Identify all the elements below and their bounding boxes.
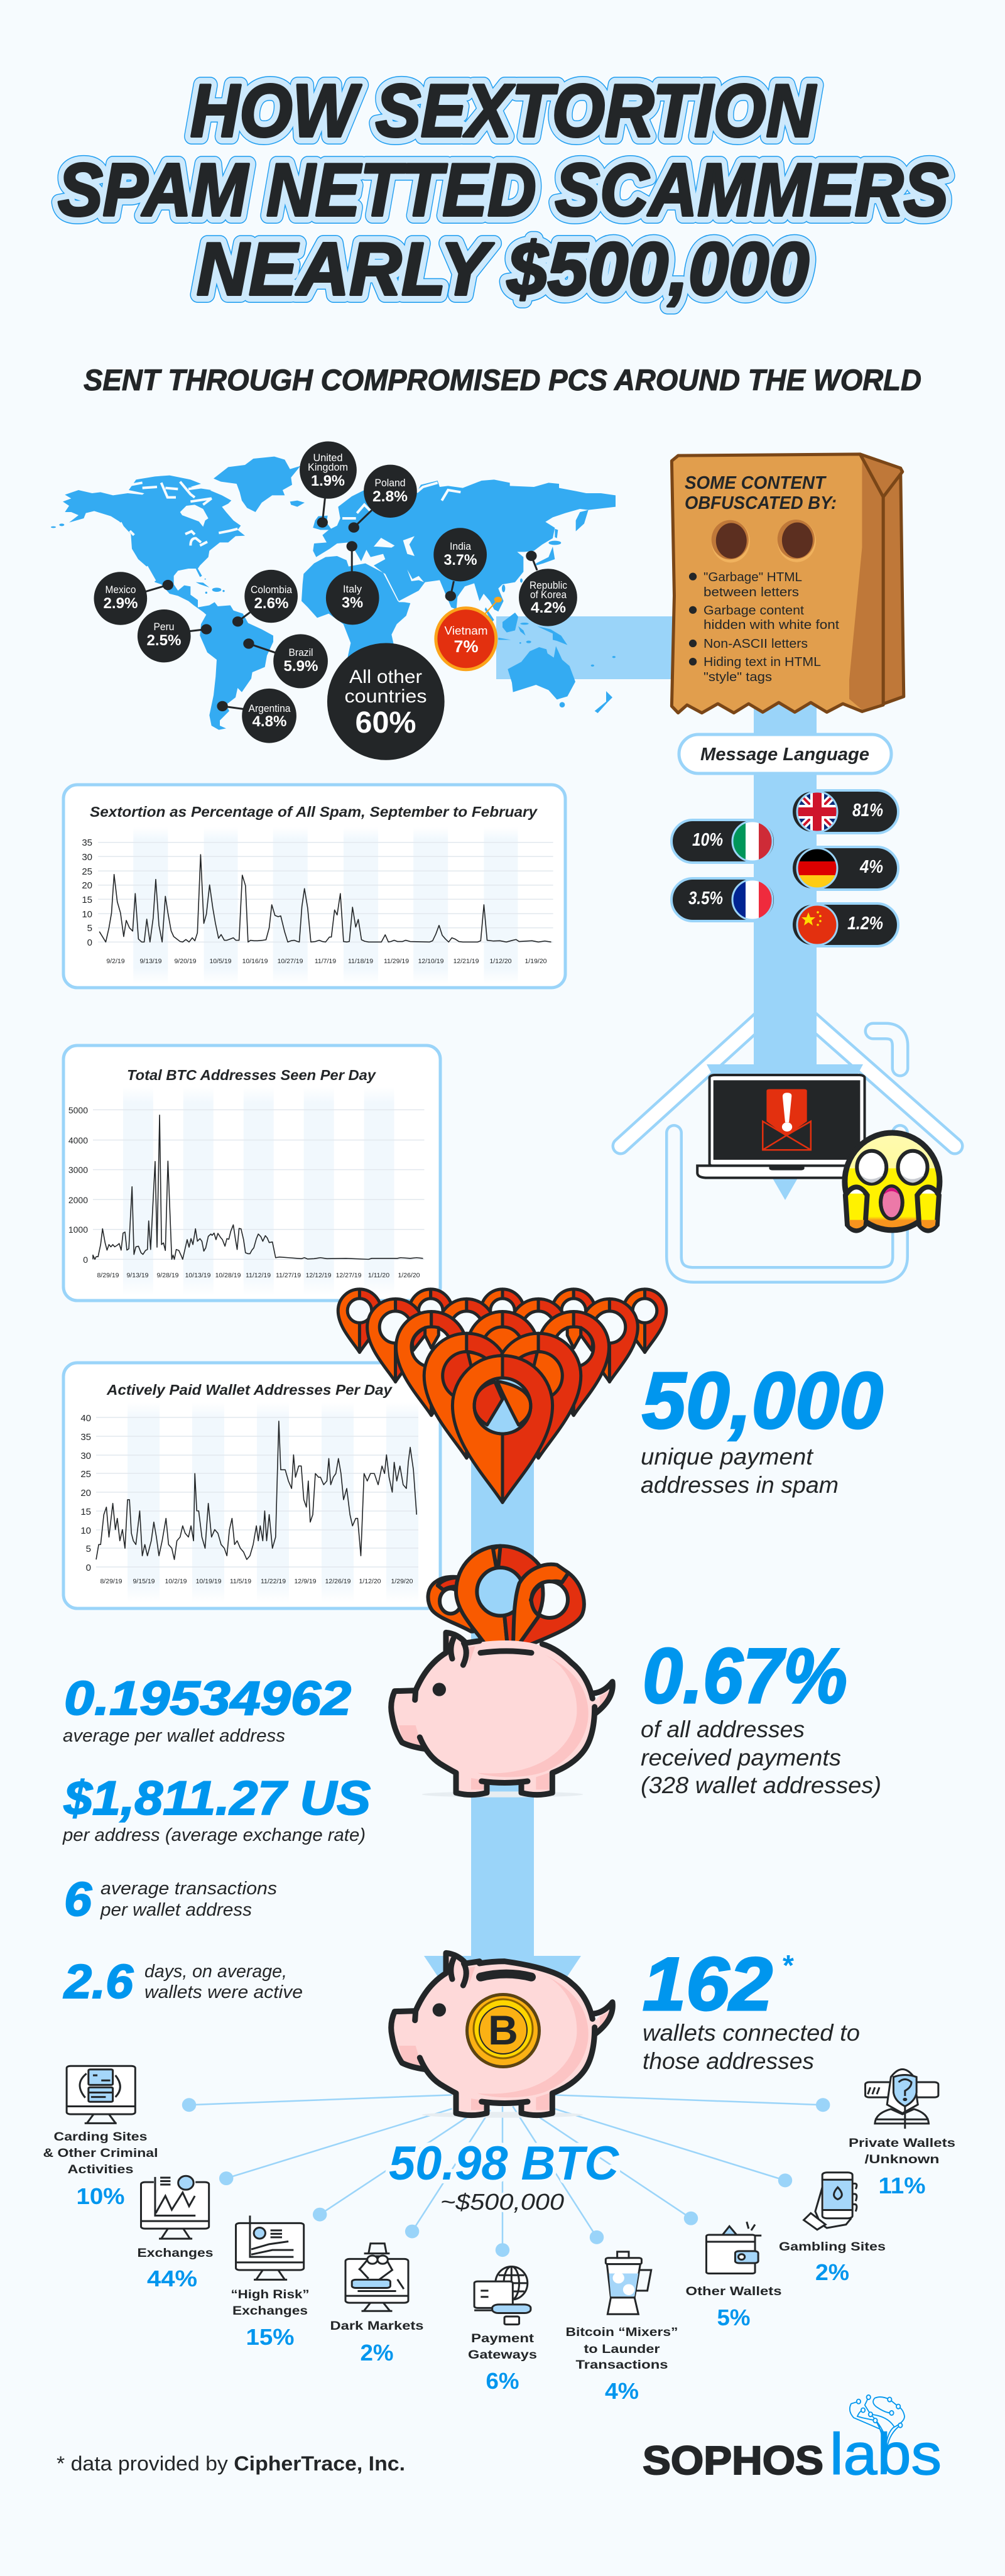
- x axis labels: 10/5/19: [209, 958, 232, 965]
- y axis labels: 0: [83, 1255, 88, 1265]
- stat: days active: days, on average,: [144, 1962, 287, 1982]
- map callouts: [94, 442, 577, 760]
- icon: monitor with spy: [345, 2244, 408, 2311]
- x axis labels: 1/29/20: [391, 1578, 413, 1585]
- second row pins: [367, 1299, 638, 1382]
- destination: dark markets: 2%: [361, 2340, 393, 2366]
- bag list: Hiding text in HTML: [704, 655, 821, 669]
- stat: 50,000: unique payment: [641, 1444, 814, 1470]
- house outline: [621, 996, 955, 1275]
- bag heading: OBFUSCATED BY:: [685, 493, 837, 513]
- bag list: between letters: [704, 586, 799, 599]
- callout labels: countries: [344, 686, 427, 707]
- destination: bitcoin mixers: Transactions: [575, 2358, 668, 2372]
- y axis labels: 20: [82, 880, 92, 891]
- icon: monitor with rising graph: [236, 2215, 304, 2279]
- x axis labels: 11/22/19: [261, 1578, 286, 1585]
- x axis labels: 12/9/19: [294, 1578, 317, 1585]
- line chart: [96, 1402, 418, 1602]
- stat: dollars per address: $1,811.27 US: [63, 1772, 371, 1825]
- pig shading: [399, 1646, 609, 1789]
- chart title: Actively Paid Wallet Addresses Per Day: [106, 1382, 393, 1398]
- bag heading: [685, 473, 837, 513]
- title: HOW SEXTORTION: [190, 69, 817, 153]
- location pins cluster: [338, 1289, 666, 1502]
- language: german: 4%: [859, 857, 883, 877]
- ground shadow: [422, 1791, 583, 1798]
- x axis labels: 9/28/19: [156, 1272, 179, 1279]
- destination: gambling sites: 2%: [815, 2259, 849, 2285]
- stat: average transactions: [64, 1873, 277, 1926]
- icon: wallet: [706, 2222, 761, 2273]
- destination: bitcoin mixers: Bitcoin “Mixers”: [565, 2325, 678, 2339]
- bitcoin coin: [465, 1993, 541, 2068]
- stat: 0.67%: received payments: [641, 1745, 841, 1771]
- stat: 0.67%: 0.67%: [643, 1633, 847, 1720]
- bag list: [704, 570, 839, 684]
- y axis labels: 35: [80, 1432, 91, 1443]
- language: english: [791, 790, 898, 833]
- chart panel: actively paid wallets: [63, 1363, 440, 1608]
- logo: sophoslabs: [643, 2395, 942, 2487]
- destination: carding sites: Activities: [68, 2163, 134, 2176]
- destination: payment gateways: [468, 2266, 537, 2394]
- stat: 162 wallets: wallets connected to: [643, 2020, 860, 2046]
- x axis labels: 1/12/20: [489, 958, 512, 965]
- destination: bitcoin mixers: 4%: [605, 2378, 639, 2404]
- stat: 0.67%: (328 wallet addresses): [641, 1772, 881, 1798]
- language: chinese: [791, 903, 898, 946]
- callout labels: Peru: [153, 621, 175, 633]
- stat: dollars per address: [62, 1772, 371, 1845]
- logo wordmark: SOPHOS: [643, 2438, 823, 2483]
- y axis labels: 20: [80, 1488, 91, 1498]
- ground shadow: [422, 2112, 583, 2118]
- third row pins: [396, 1312, 609, 1416]
- americas: [51, 457, 332, 730]
- destination: private wallets: /Unknown: [864, 2153, 940, 2166]
- icon: monitor with chart: [141, 2175, 209, 2239]
- connector bands: [424, 616, 863, 2073]
- x axis labels: 9/2/19: [106, 958, 125, 965]
- y axis labels: 15: [82, 895, 92, 905]
- icon: hooded figure with shield: [866, 2069, 938, 2129]
- x axis labels: 9/13/19: [139, 958, 162, 965]
- band over roof: [754, 974, 817, 1068]
- callout labels: 3.7%: [443, 552, 477, 569]
- bag body: [671, 454, 904, 713]
- bitcoin coin: B: [488, 2007, 518, 2053]
- callout labels: Mexico: [106, 584, 136, 596]
- total BTC: ~$500,000: [440, 2189, 564, 2215]
- destination: carding sites: Carding Sites: [54, 2130, 148, 2144]
- logo circuit tree: [850, 2395, 905, 2447]
- x axis labels: [100, 1578, 413, 1585]
- pig fill: [391, 1632, 612, 1794]
- x axis labels: 9/20/19: [174, 958, 197, 965]
- callout labels: 2.9%: [103, 595, 138, 612]
- callout labels: 4.8%: [253, 713, 286, 730]
- x axis labels: 10/28/19: [215, 1272, 241, 1279]
- x axis labels: 10/13/19: [185, 1272, 211, 1279]
- callout labels: 7%: [454, 637, 479, 656]
- x axis labels: 1/12/20: [359, 1578, 381, 1585]
- icon: blender: [606, 2252, 651, 2314]
- stat: 162 wallets: 162: [643, 1942, 773, 2026]
- back row pins: [338, 1289, 666, 1352]
- x axis labels: 12/10/19: [418, 958, 444, 965]
- destination: payment gateways: Gateways: [468, 2348, 537, 2362]
- x axis labels: 11/27/19: [276, 1272, 301, 1279]
- callout labels: Republic: [530, 579, 567, 591]
- stat: average transactions: average transactions: [100, 1879, 277, 1899]
- title: [58, 69, 948, 311]
- line chart: [93, 1087, 425, 1296]
- europe asia africa oceania: [302, 479, 616, 713]
- callout labels: Argentina: [249, 702, 291, 714]
- bag list: "style" tags: [704, 670, 772, 684]
- y axis labels: 5000: [68, 1105, 88, 1115]
- callout labels: Vietnam: [445, 625, 487, 637]
- x axis labels: 10/2/19: [165, 1578, 187, 1585]
- pig fill: [391, 1953, 612, 2115]
- y axis labels: 1000: [68, 1225, 88, 1235]
- destination: private wallets: [849, 2069, 955, 2198]
- destination: exchanges: Exchanges: [137, 2246, 214, 2260]
- x axis labels: 11/7/19: [315, 958, 336, 965]
- y axis labels: 25: [80, 1469, 91, 1480]
- stat: dollars per address: per address (average exchange rate): [62, 1825, 366, 1845]
- x axis labels: 12/26/19: [325, 1578, 351, 1585]
- y axis labels: 40: [80, 1413, 91, 1424]
- callout labels: All other: [349, 667, 422, 687]
- y axis labels: [80, 1413, 91, 1573]
- chart panel: total BTC addresses: [63, 1045, 440, 1301]
- laptop with warning envelope: [697, 1075, 872, 1178]
- y axis labels: 35: [82, 838, 92, 848]
- callout labels: 2.8%: [372, 488, 408, 505]
- pig outline: [391, 1632, 612, 1795]
- pig with pins: [391, 1546, 612, 1798]
- callout labels: Kingdom: [308, 461, 348, 473]
- logo: sophoslabs: labs: [830, 2421, 942, 2487]
- x axis labels: 10/16/19: [242, 958, 268, 965]
- title: NEARLY $500,000: [197, 227, 809, 311]
- destination: payment gateways: 6%: [486, 2368, 519, 2394]
- subtitle: SENT THROUGH COMPROMISED PCS AROUND THE WORLD: [84, 363, 921, 396]
- destination: other wallets: [686, 2222, 782, 2330]
- callout labels: 3%: [342, 594, 363, 611]
- stat: 162 wallets: those addresses: [643, 2048, 814, 2074]
- stat: days active: [63, 1955, 303, 2009]
- callout labels: 2.6%: [254, 595, 289, 612]
- y axis labels: 10: [82, 909, 92, 920]
- y axis labels: 3000: [68, 1165, 88, 1175]
- pig outline: [391, 1953, 612, 2115]
- destination: payment gateways: Payment: [471, 2332, 535, 2345]
- x axis labels: 12/12/19: [306, 1272, 332, 1279]
- stat: average per wallet: [63, 1672, 351, 1746]
- y axis labels: 10: [80, 1525, 91, 1536]
- destination: gambling sites: Gambling Sites: [779, 2240, 886, 2254]
- x axis labels: 11/18/19: [348, 958, 373, 965]
- destination: other wallets: 5%: [717, 2305, 750, 2330]
- icon: monitor with cards: [67, 2066, 135, 2123]
- front pin: [452, 1356, 553, 1502]
- destination: bitcoin mixers: [565, 2252, 678, 2404]
- x axis labels: 9/15/19: [133, 1578, 155, 1585]
- callout labels: India: [450, 540, 471, 552]
- pig shading: [399, 1967, 609, 2110]
- spokes from pig to destinations: [182, 2095, 830, 2257]
- message language pill: [679, 734, 891, 773]
- destination: high risk exchanges: Exchanges: [232, 2304, 308, 2318]
- pig with bitcoin: [391, 1953, 612, 2118]
- envelope alert: [763, 1089, 811, 1150]
- callout labels: 5.9%: [284, 658, 318, 675]
- line chart: [98, 827, 553, 984]
- x axis labels: 1/26/20: [398, 1272, 420, 1279]
- title: NEARLY $500,000: [197, 227, 809, 311]
- pins dropping into slot: [428, 1546, 584, 1648]
- chart title: Sextortion as Percentage of All Spam, September to February: [90, 804, 538, 820]
- icon: phone in hand: [804, 2173, 857, 2230]
- y axis labels: 15: [80, 1507, 91, 1517]
- pig eye: [433, 2003, 446, 2017]
- language: chinese: 1.2%: [847, 914, 883, 934]
- destination: private wallets: Private Wallets: [849, 2136, 955, 2150]
- callout labels: Poland: [374, 477, 406, 489]
- bag list: "Garbage" HTML: [704, 570, 802, 584]
- bag heading: SOME CONTENT: [685, 473, 827, 493]
- stat: 50,000: [641, 1356, 883, 1498]
- language: italian: 10%: [692, 830, 723, 850]
- y axis labels: 2000: [68, 1195, 88, 1205]
- icon: globe and card: [474, 2266, 531, 2325]
- callout pins and leaders: [94, 442, 577, 760]
- title: HOW SEXTORTION: [190, 69, 817, 153]
- x axis labels: 8/29/19: [97, 1272, 119, 1279]
- stat: 162 wallets: [643, 1942, 860, 2074]
- destination: exchanges: 44%: [147, 2266, 197, 2291]
- vietnam callout: [485, 599, 498, 614]
- x axis labels: 1/19/20: [524, 958, 547, 965]
- stat: 50,000: 50,000: [642, 1356, 883, 1445]
- chart title: Total BTC Addresses Seen Per Day: [127, 1067, 376, 1083]
- destination: high risk exchanges: [231, 2215, 309, 2350]
- y axis labels: 0: [86, 1563, 91, 1573]
- x axis labels: [97, 1272, 420, 1279]
- callout labels: Italy: [343, 583, 362, 595]
- language: italian: [671, 820, 775, 863]
- x axis labels: 11/29/19: [384, 958, 409, 965]
- x axis labels: 10/27/19: [278, 958, 303, 965]
- callout labels: 1.9%: [311, 472, 345, 489]
- y axis labels: [82, 838, 92, 948]
- footnote: * data provided by CipherTrace, Inc.: [57, 2452, 405, 2475]
- stat: 50,000: addresses in spam: [641, 1472, 839, 1498]
- stat: 162 wallets: *: [783, 1949, 794, 1982]
- destination: carding sites: & Other Criminal: [43, 2146, 158, 2160]
- paper bag panel: [671, 454, 904, 713]
- y axis labels: 30: [80, 1451, 91, 1461]
- destination: high risk exchanges: “High Risk”: [231, 2288, 309, 2301]
- x axis labels: 10/19/19: [196, 1578, 222, 1585]
- x axis labels: 11/5/19: [230, 1578, 251, 1585]
- destination: bitcoin mixers: to Launder: [584, 2342, 660, 2356]
- x axis labels: 9/13/19: [126, 1272, 149, 1279]
- title: NEARLY $500,000: [197, 227, 809, 311]
- total BTC: [389, 2137, 619, 2215]
- chart panel: sextortion percentage: [63, 785, 565, 988]
- bag list: Garbage content: [704, 604, 804, 618]
- message language pill: Message Language: [700, 745, 869, 765]
- stat: 0.67%: of all addresses: [641, 1716, 805, 1742]
- destination: other wallets: Other Wallets: [686, 2284, 782, 2298]
- destination: carding sites: [43, 2066, 158, 2209]
- callout labels: United: [313, 452, 343, 464]
- eye holes: [712, 520, 816, 562]
- emoji: screaming face: [845, 1133, 940, 1231]
- bag list: hidden with white font: [704, 618, 839, 632]
- destination: high risk exchanges: 15%: [246, 2324, 294, 2350]
- callout labels: Colombia: [251, 584, 292, 596]
- stat: average per wallet: average per wallet address: [63, 1726, 285, 1746]
- x axis labels: 8/29/19: [100, 1578, 122, 1585]
- total BTC: 50.98 BTC: [389, 2137, 619, 2190]
- x axis labels: [106, 958, 547, 965]
- language: french: [671, 878, 775, 921]
- x axis labels: 12/21/19: [454, 958, 479, 965]
- y axis labels: 25: [82, 866, 92, 877]
- destination: dark markets: Dark Markets: [330, 2319, 424, 2333]
- stat: days active: 2.6: [63, 1955, 134, 2009]
- stat: average per wallet: 0.19534962: [64, 1672, 351, 1725]
- y axis labels: 0: [87, 937, 92, 948]
- destination: dark markets: [330, 2244, 424, 2366]
- y axis labels: 5: [87, 923, 92, 934]
- stat: 0.67%: [641, 1633, 881, 1798]
- language: german: [791, 847, 898, 890]
- world map: [51, 457, 616, 730]
- stat: days active: wallets were active: [144, 1982, 303, 2002]
- y axis labels: 4000: [68, 1135, 88, 1145]
- laptop: [697, 1075, 872, 1178]
- y axis labels: [68, 1105, 88, 1265]
- callout labels: [103, 452, 567, 740]
- callout labels: 60%: [356, 706, 416, 740]
- x axis labels: 12/27/19: [336, 1272, 362, 1279]
- pig eye: [433, 1683, 446, 1696]
- fourth row pins: [424, 1333, 581, 1458]
- bullets: [689, 573, 697, 665]
- bag list: Non-ASCII letters: [704, 637, 808, 651]
- language: english: 81%: [852, 800, 883, 821]
- stat: average transactions: 6: [64, 1873, 92, 1926]
- callout labels: Brazil: [289, 647, 313, 658]
- destination: carding sites: 10%: [77, 2183, 124, 2209]
- callout labels: 2.5%: [147, 632, 181, 649]
- destination: private wallets: 11%: [878, 2173, 926, 2198]
- x axis labels: 11/12/19: [246, 1272, 271, 1279]
- title: HOW SEXTORTION: [190, 69, 817, 153]
- stat: average transactions: per wallet address: [100, 1900, 252, 1920]
- destination: gambling sites: [779, 2173, 886, 2285]
- y axis labels: 30: [82, 852, 92, 863]
- x axis labels: 1/11/20: [368, 1272, 389, 1279]
- callout labels: 4.2%: [531, 599, 566, 616]
- destination: exchanges: [137, 2175, 214, 2291]
- language: french: 3.5%: [688, 888, 723, 909]
- y axis labels: 5: [86, 1544, 91, 1554]
- callout labels: of Korea: [530, 589, 567, 601]
